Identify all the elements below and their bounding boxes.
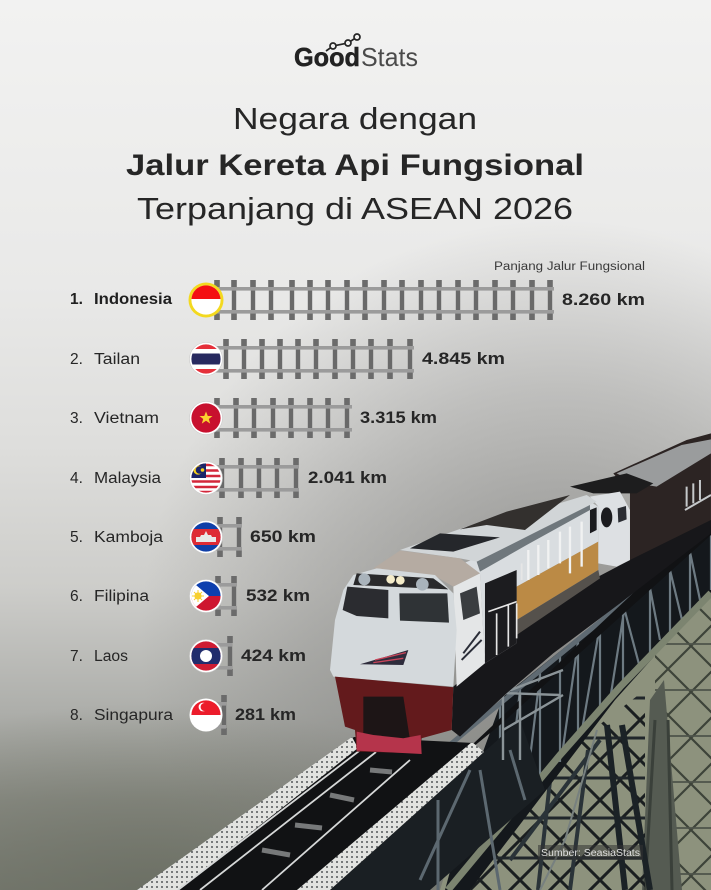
country name: Laos [94,648,128,665]
perforated walkway left [137,737,358,890]
rank: 4. [70,470,83,487]
logo wordmark bold: Good [294,42,360,72]
rank: 2. [70,351,83,368]
logo icon: chart line [326,34,360,51]
flag: Thailand [190,342,222,376]
hood side [463,502,598,663]
country name: Malaysia [94,470,161,487]
value: 532 km [246,586,310,605]
country name: Kamboja [94,529,163,546]
value: 2.041 km [308,468,387,487]
rank: 3. [70,410,83,427]
hood side shadow band [477,503,590,572]
track [214,280,554,320]
value: 8.260 km [562,290,645,309]
roof solar panels [410,533,500,552]
track [215,576,237,616]
bridge structure [137,520,711,890]
carriage [570,433,711,570]
country name: Indonesia [94,291,172,308]
title [126,101,584,226]
perforated walkway right [297,742,484,890]
rails [178,748,410,890]
green valley behind the bridge [440,530,711,890]
truss diagonals [500,535,711,832]
source label [538,845,643,860]
row 1: Indonesia [70,280,645,320]
cab [590,492,630,567]
rank: 6. [70,588,83,605]
nose front [330,568,457,687]
track [215,636,233,676]
logo wordmark light: Stats [361,42,418,72]
train [330,433,711,754]
row 5: Kamboja [70,517,316,557]
orange stripe [517,542,598,620]
title line 1: Negara dengan [233,101,477,136]
title line 2: Jalur Kereta Api Fungsional [126,149,584,182]
row 8: Singapura [70,695,296,735]
dark girder web [330,720,545,890]
flag: Laos [190,640,222,672]
lower side panel [517,570,600,635]
roof grime [460,495,570,530]
row 6: Filipina [70,576,310,616]
red lower front [335,677,453,753]
rank: 8. [70,707,83,724]
side door [485,570,517,663]
nose side [453,573,485,687]
lower olive chord [448,593,711,890]
underframe [452,520,711,737]
brow [353,573,448,589]
value: 3.315 km [360,408,437,427]
near trestle lattice [470,690,650,890]
flag: Philippines [190,580,222,612]
row 3: Vietnam [70,398,437,438]
side ribs [528,522,582,580]
value: 4.845 km [422,349,505,368]
track [215,458,299,498]
row 2: Tailan [70,339,505,379]
flag: Cambodia [190,520,222,554]
country name: Tailan [94,351,140,368]
value: 650 km [250,527,316,546]
country name: Singapura [94,707,173,724]
handrail box [503,670,563,760]
flag: Indonesia [188,282,224,318]
flag: Singapore [190,698,222,732]
background: forest haze [0,640,500,890]
source text: Sumber: SeasiaStats [541,848,640,859]
right windshield [399,593,449,623]
value: 424 km [241,646,306,665]
column label: Panjang Jalur Fungsional [494,261,645,273]
logo [294,34,418,72]
row 4: Malaysia [70,458,387,498]
upper truss chord [360,530,711,820]
value: 281 km [235,705,296,724]
country name: Filipina [94,588,149,605]
track [215,517,242,557]
title line 3: Terpanjang di ASEAN 2026 [137,191,573,226]
track [215,695,227,735]
rank: 1. [70,291,83,308]
row 7: Laos [70,636,306,676]
track bed [137,520,711,890]
nose top [373,551,480,587]
hood roof [400,495,597,562]
flag: Vietnam [190,402,222,434]
truss web behind the chords [445,530,711,890]
nose emblem [360,650,408,665]
left windshield [343,587,388,618]
flag: Malaysia [190,462,222,494]
rank: 5. [70,529,83,546]
track [214,398,352,438]
lights [342,573,436,698]
red bumper [357,732,422,754]
track [215,339,414,379]
sleepers [262,770,392,855]
rank: 7. [70,648,83,665]
far trestle tower [642,600,711,890]
country name: Vietnam [94,410,159,427]
